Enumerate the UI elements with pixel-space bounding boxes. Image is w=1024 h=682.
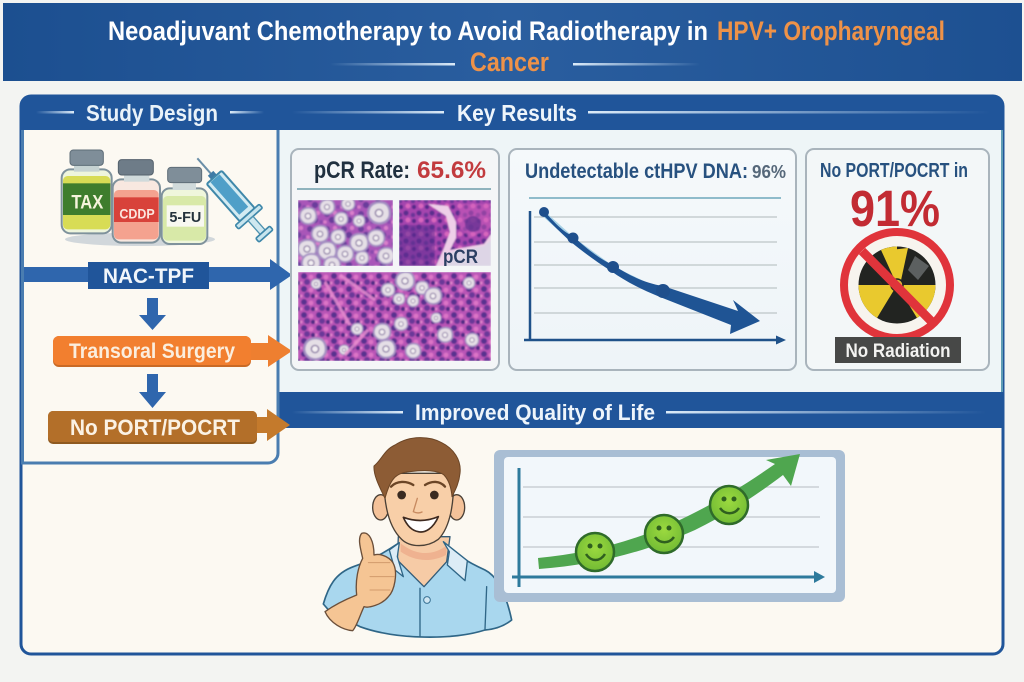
card: undetectable ctHPV DNA (509, 149, 796, 370)
histology image: top right: pCR (443, 247, 478, 268)
label: NAC-TPF (88, 262, 209, 289)
face (384, 473, 454, 546)
arrow: down to surgery (139, 298, 166, 330)
heading: ctHPV DNA: Undetectable ctHPV DNA: (525, 160, 748, 183)
band: improved quality of life (278, 392, 1002, 428)
vial: TAX: TAX (71, 192, 103, 213)
main content panel (21, 96, 1003, 654)
arrow: no PORT to quality of life (256, 409, 290, 441)
ears (373, 495, 389, 520)
histology image: top right (399, 200, 491, 268)
quality of life chart (494, 450, 845, 602)
label: NAC-TPF: NAC-TPF (103, 265, 194, 288)
shirt (323, 542, 512, 637)
line chart: declining ctHPV DNA (524, 207, 786, 344)
smile (403, 517, 438, 532)
vial: 5-FU (162, 167, 207, 244)
eyes (397, 491, 406, 499)
smiley 3 (710, 486, 748, 524)
label: no PORT/POCRT: No PORT/POCRT (70, 415, 241, 440)
label: transoral surgery (53, 336, 251, 367)
key results background (279, 130, 1002, 392)
eyebrows (391, 482, 445, 487)
label: no radiation: No Radiation (846, 341, 950, 362)
histology image: bottom (298, 272, 491, 361)
main title: Neoadjuvant Chemotherapy to Avoid Radiotherapy in (108, 16, 708, 46)
arrow: rising quality of life (538, 454, 800, 569)
heading: pCR rate: pCR Rate: (314, 157, 410, 184)
collar (389, 542, 467, 581)
heading: study design: Study Design (86, 100, 218, 126)
card: pCR rate (291, 149, 499, 370)
panel: study design (22, 100, 292, 463)
arrow: down to no PORT (139, 374, 166, 408)
smiley 1 (576, 533, 614, 571)
heading: no PORT/POCRT in: No PORT/POCRT in (820, 160, 968, 182)
label: transoral surgery: Transoral Surgery (69, 340, 235, 363)
heading: pCR rate (314, 157, 486, 184)
heading: key results: Key Results (457, 100, 577, 126)
histology image: top left (298, 200, 393, 266)
smiley 2 (645, 515, 683, 553)
neck (397, 537, 450, 587)
card: no PORT/POCRT (806, 149, 989, 370)
nose (413, 498, 422, 513)
shirt button (424, 597, 430, 603)
illustration: smiling man giving thumbs up (323, 438, 512, 637)
arrow: surgery to key results (250, 335, 292, 367)
main title: HPV+ Oropharyngeal (717, 16, 945, 46)
vial: CDDP (113, 160, 160, 243)
band: improved quality of life: Improved Quality of Life (415, 400, 655, 425)
vial: 5-FU: 5-FU (169, 210, 201, 226)
hair (374, 438, 460, 498)
arm and thumbs-up hand (325, 533, 396, 631)
arrow: NAC-TPF to key results (24, 259, 292, 290)
header banner (3, 3, 1022, 81)
main title: Cancer (470, 47, 549, 77)
icon: syringe (185, 148, 278, 247)
heading: ctHPV DNA: 96% (752, 162, 786, 182)
stat: 91%: 91% (850, 180, 940, 237)
label: no PORT/POCRT (48, 411, 257, 444)
vial: CDDP: CDDP (119, 205, 155, 221)
heading: pCR rate: 65.6% (417, 157, 486, 184)
icon: drug vials and syringe (62, 148, 278, 247)
main title (108, 16, 945, 77)
icon: no radiation sign (844, 232, 950, 338)
vial: TAX (62, 150, 112, 233)
